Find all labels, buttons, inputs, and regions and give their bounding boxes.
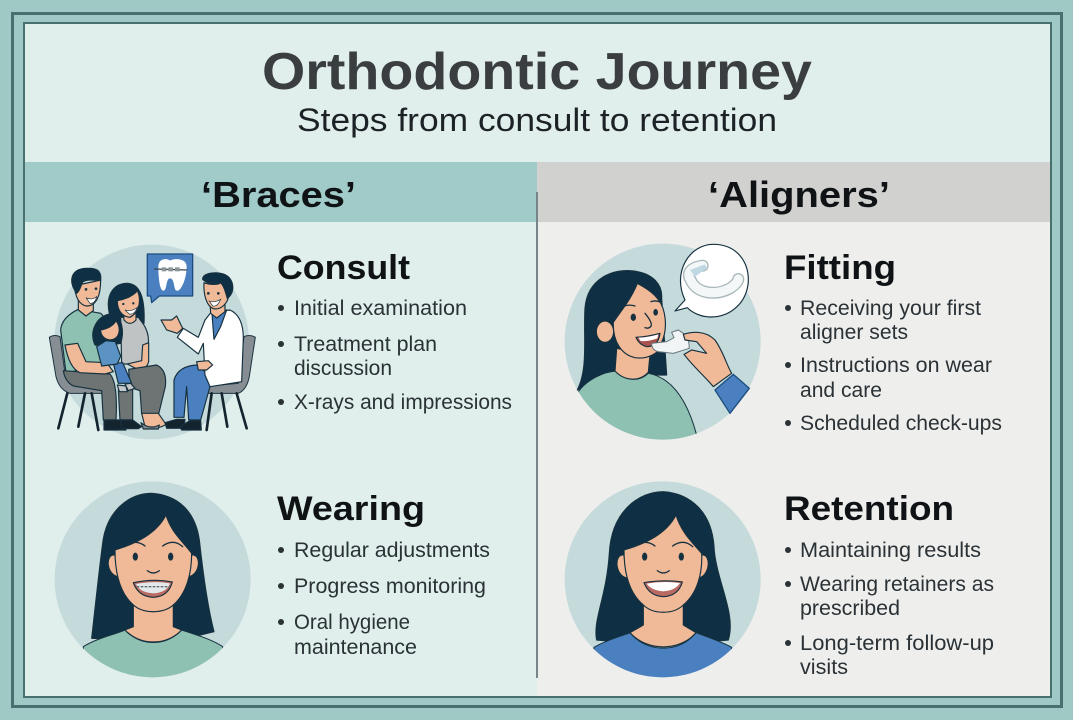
column divider	[536, 192, 538, 678]
step: Wearing: Oral hygiene	[294, 611, 410, 634]
step: Retention: prescribed	[800, 597, 900, 620]
step: Fitting: Fitting	[784, 249, 896, 287]
step: Consult: Treatment plan	[294, 333, 437, 356]
title: Orthodontic Journey	[262, 43, 812, 101]
step: Retention: Long-term follow-up	[800, 632, 994, 655]
step: Fitting: aligner sets	[800, 321, 908, 344]
illustration: woman fitting aligner	[565, 244, 761, 448]
step: Retention: visits	[800, 656, 848, 679]
step: Consult: X-rays and impressions	[294, 391, 512, 414]
illustration: family consulting orthodontist	[49, 245, 255, 439]
step: Consult	[277, 249, 512, 414]
icon: tooth speech bubble	[147, 254, 193, 303]
step: Retention: Maintaining results	[800, 539, 981, 562]
step: Fitting: and care	[800, 379, 882, 402]
illustration: woman wearing braces	[55, 481, 251, 683]
step: Wearing: Regular adjustments	[294, 539, 490, 562]
step: Wearing: Progress monitoring	[294, 575, 486, 598]
header: Aligners	[537, 162, 1050, 222]
step: Fitting: Instructions on wear	[800, 354, 992, 377]
step: Consult: Initial examination	[294, 297, 467, 320]
step: Retention	[784, 490, 994, 679]
illustration: smiling woman with retainers	[565, 481, 761, 683]
step: Consult: discussion	[294, 357, 392, 380]
step: Retention: Wearing retainers as	[800, 573, 994, 596]
step: Fitting: Receiving your first	[800, 297, 981, 320]
woman in grey	[108, 283, 166, 429]
child	[93, 314, 135, 392]
man in teal	[61, 268, 142, 430]
step: Wearing	[277, 490, 490, 659]
header: Aligners: ‘Aligners’	[708, 174, 890, 215]
icon: chairs	[49, 335, 255, 430]
step: Retention: Retention	[784, 490, 954, 528]
step: Wearing: maintenance	[294, 636, 417, 659]
orthodontist	[161, 273, 243, 430]
step: Consult: Consult	[277, 249, 410, 287]
subtitle: Steps from consult to retention	[297, 102, 777, 138]
header: Braces	[25, 162, 537, 222]
header: Braces: ‘Braces’	[201, 174, 356, 215]
step: Fitting: Scheduled check-ups	[800, 412, 1002, 435]
step: Wearing: Wearing	[277, 490, 425, 528]
icon: aligner speech bubble	[675, 244, 748, 317]
step: Fitting	[784, 249, 1002, 435]
